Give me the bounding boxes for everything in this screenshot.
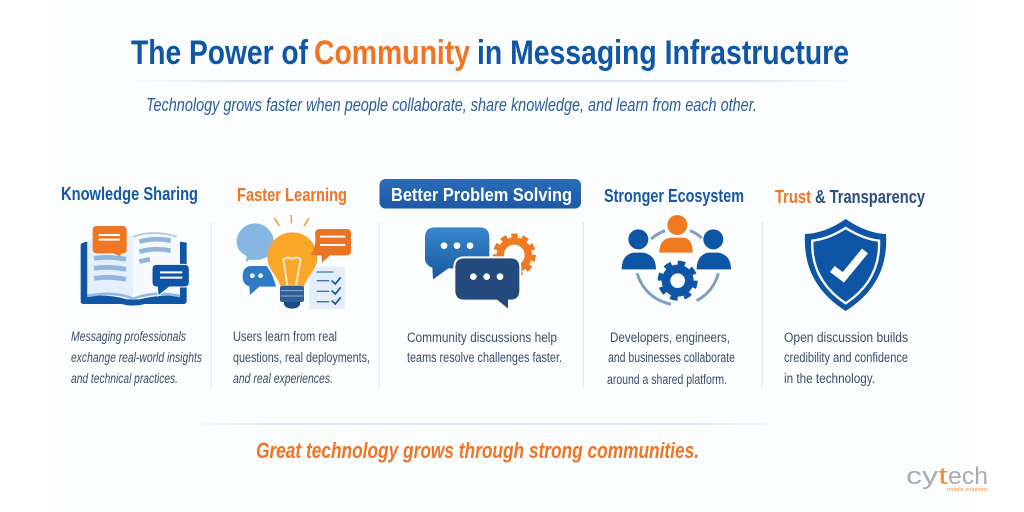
heading: knowledge sharing: Knowledge Sharing bbox=[61, 184, 198, 204]
panel: better problem solving bbox=[380, 179, 581, 365]
text: trust and transparency description: Open discussion builds bbox=[784, 330, 908, 345]
panel: trust and transparency bbox=[775, 187, 925, 386]
title: The Power of bbox=[131, 34, 309, 72]
heading: trust and transparency bbox=[775, 187, 925, 207]
logo: cytech: mobile solutions bbox=[947, 487, 988, 493]
text: stronger ecosystem description: and businesses collaborate bbox=[608, 350, 735, 365]
heading: stronger ecosystem: Stronger Ecosystem bbox=[604, 186, 744, 206]
heading: trust and transparency: Trust bbox=[775, 187, 811, 207]
text: better problem solving description: teams resolve challenges faster. bbox=[407, 350, 562, 365]
text: knowledge sharing description: and technical practices. bbox=[71, 371, 178, 386]
text: knowledge sharing description bbox=[71, 329, 202, 386]
text: better problem solving description bbox=[407, 330, 562, 365]
closing tagline: Great technology grows through strong communities. bbox=[256, 438, 699, 463]
text: knowledge sharing description: Messaging professionals bbox=[71, 329, 186, 344]
icon: chat bubbles with gear bbox=[425, 227, 534, 311]
panel: stronger ecosystem bbox=[604, 186, 744, 387]
heading pill: better problem solving: Better Problem Solving bbox=[391, 185, 572, 205]
text: trust and transparency description: in the technology. bbox=[784, 371, 875, 386]
text: faster learning description: and real experiences. bbox=[233, 371, 333, 386]
icon: shield with check mark bbox=[805, 219, 886, 311]
text: better problem solving description: Community discussions help bbox=[407, 330, 557, 345]
title: Community bbox=[314, 34, 470, 72]
icon: open book with chat bubbles bbox=[81, 226, 189, 306]
heading: trust and transparency: & Transparency bbox=[815, 187, 925, 207]
text: faster learning description: questions, real deployments, bbox=[233, 350, 370, 365]
logo: cytech: t bbox=[938, 463, 948, 490]
text: faster learning description bbox=[233, 329, 370, 386]
text: trust and transparency description bbox=[784, 330, 908, 386]
title bbox=[131, 34, 849, 72]
icon: light bulb with chat bubbles and checklist bbox=[237, 215, 351, 309]
text: stronger ecosystem description: Developers, engineers, bbox=[610, 330, 730, 345]
logo: cytech: cy bbox=[906, 463, 938, 490]
heading pill: better problem solving bbox=[380, 179, 581, 208]
title: in Messaging Infrastructure bbox=[477, 34, 849, 72]
logo: cytech bbox=[906, 463, 988, 493]
text: knowledge sharing description: exchange real-world insights bbox=[71, 350, 202, 365]
text: stronger ecosystem description: around a shared platform. bbox=[607, 372, 727, 387]
subtitle: Technology grows faster when people collaborate, share knowledge, and learn from each other. bbox=[146, 95, 757, 115]
panel: knowledge sharing bbox=[61, 184, 202, 386]
text: trust and transparency description: credibility and confidence bbox=[784, 350, 908, 365]
panel: faster learning bbox=[233, 185, 370, 386]
heading: faster learning: Faster Learning bbox=[237, 185, 347, 205]
logo: cytech: ech bbox=[948, 463, 988, 490]
text: stronger ecosystem description bbox=[607, 330, 735, 387]
icon: people around a gear bbox=[622, 215, 731, 304]
text: faster learning description: Users learn from real bbox=[233, 329, 337, 344]
